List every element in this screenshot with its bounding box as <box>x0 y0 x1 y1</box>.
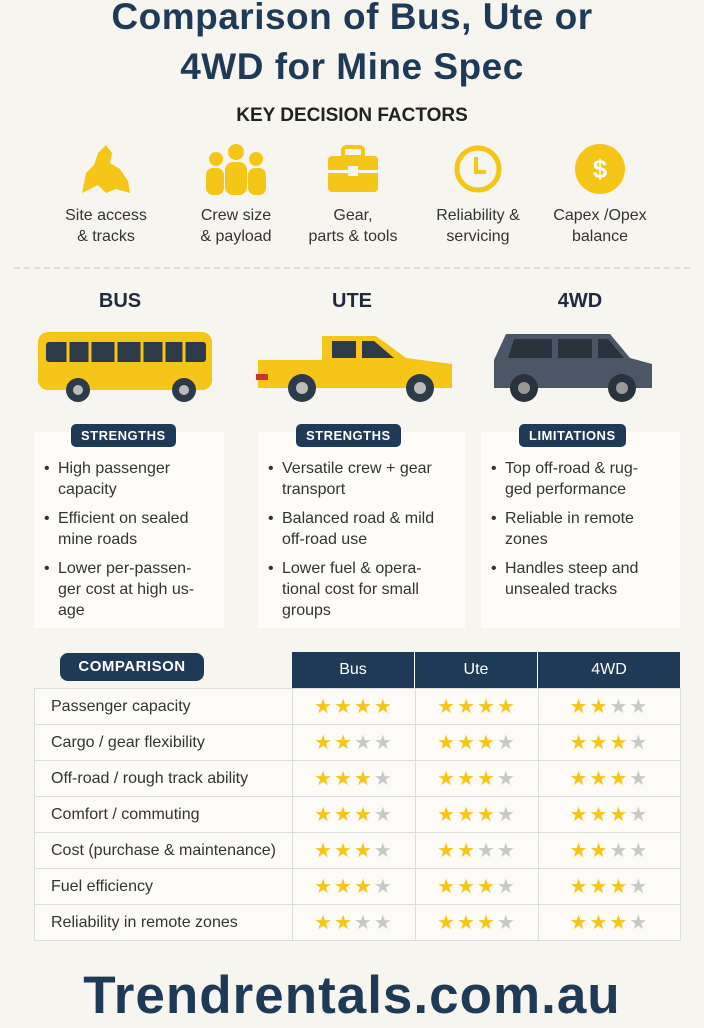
factor: capex: $ <box>593 154 608 184</box>
comparison table: ★★★★ <box>314 696 394 718</box>
badge: ute strengths <box>296 424 401 447</box>
comparison table: Cost (purchase & maintenance) <box>51 842 276 858</box>
panel: ute strengths: tional cost for small <box>282 581 419 598</box>
panel: 4wd limitations: unsealed tracks <box>505 581 617 598</box>
factor: gear <box>309 145 397 245</box>
heading: bus: BUS <box>99 290 141 312</box>
panel: bus strengths <box>34 432 224 628</box>
factor: gear: parts & tools <box>309 228 397 245</box>
factor: capex: Capex /Opex <box>553 207 647 224</box>
panel: ute strengths <box>258 432 465 628</box>
comparison table: ★★★★ <box>314 732 394 754</box>
badge: 4wd limitations: LIMITATIONS <box>529 428 616 443</box>
panel: ute strengths: groups <box>282 602 331 619</box>
comparison table: ★★★★ <box>570 768 649 790</box>
comparison table: ★★★★ <box>437 912 517 934</box>
comparison table: ★★★★ <box>437 840 517 862</box>
title: 4WD for Mine Spec <box>180 46 524 87</box>
comparison table: ★★★★ <box>314 804 394 826</box>
comparison table: Cargo / gear flexibility <box>51 734 205 750</box>
panel: 4wd limitations: ged performance <box>505 481 626 498</box>
icon: ute <box>256 336 452 402</box>
panel: bus strengths: Lower per-passen- <box>58 560 191 577</box>
comparison table: ★★★★ <box>437 696 517 718</box>
comparison table: ★★★★ <box>570 912 649 934</box>
heading: key decision factors: KEY DECISION FACTORS <box>236 105 468 126</box>
table header: 4WD <box>591 661 627 678</box>
comparison table: ★★★★ <box>314 768 394 790</box>
panel: bus strengths: Efficient on sealed <box>58 510 188 527</box>
panel: 4wd limitations: zones <box>505 531 548 548</box>
panel: bus strengths: age <box>58 602 85 619</box>
panel: bus strengths: capacity <box>58 481 117 498</box>
badge: comparison <box>60 653 204 681</box>
panel: 4wd limitations: Reliable in remote <box>505 510 634 527</box>
icon: bus <box>38 332 212 402</box>
panel: 4wd limitations: Handles steep and <box>505 560 638 577</box>
comparison table: Off-road / rough track ability <box>51 770 248 786</box>
comparison table: ★★★★ <box>437 876 517 898</box>
comparison table: ★★★★ <box>570 804 649 826</box>
icon: 4wd <box>494 334 652 402</box>
panel: bus strengths: mine roads <box>58 531 137 548</box>
factor: reliability <box>436 146 520 245</box>
title <box>111 0 593 87</box>
comparison table: Comfort / commuting <box>51 806 199 822</box>
heading: ute: UTE <box>332 290 372 312</box>
panel: bus strengths: ger cost at high us- <box>58 581 194 598</box>
panel: 4wd limitations: Top off-road & rug- <box>505 460 638 477</box>
factor: crew size <box>200 144 272 245</box>
comparison table: ★★★★ <box>437 768 517 790</box>
table header: Ute <box>464 661 488 678</box>
comparison table: ★★★★ <box>570 840 649 862</box>
badge: comparison: COMPARISON <box>78 658 186 675</box>
factor: crew size: & payload <box>200 228 272 245</box>
factor: reliability: servicing <box>446 228 510 245</box>
panel: ute strengths: Versatile crew + gear <box>282 460 432 477</box>
comparison table: ★★★★ <box>437 804 517 826</box>
factor: capex <box>553 144 647 245</box>
factor: site access: Site access <box>65 207 147 224</box>
badge: ute strengths: STRENGTHS <box>306 428 391 443</box>
comparison table: ★★★★ <box>570 732 649 754</box>
comparison table: Passenger capacity <box>51 698 191 714</box>
comparison table <box>34 688 681 941</box>
factor: crew size: Crew size <box>201 207 271 224</box>
panel: ute strengths: Lower fuel & opera- <box>282 560 422 577</box>
comparison table: ★★★★ <box>314 876 394 898</box>
heading: 4wd: 4WD <box>558 290 602 312</box>
panel: ute strengths: off-road use <box>282 531 367 548</box>
factor: site access: & tracks <box>77 228 135 245</box>
panel: ute strengths: transport <box>282 481 345 498</box>
comparison table: ★★★★ <box>570 876 649 898</box>
comparison table: ★★★★ <box>314 840 394 862</box>
footer url: Trendrentals.com.au <box>83 966 621 1025</box>
comparison table: ★★★★ <box>570 696 649 718</box>
factor: gear: Gear, <box>333 207 373 224</box>
table header <box>292 652 680 688</box>
factor: capex: balance <box>572 228 628 245</box>
panel: ute strengths: Balanced road & mild <box>282 510 434 527</box>
badge: bus strengths <box>71 424 176 447</box>
factor: site access <box>65 145 147 245</box>
panel: bus strengths: High passenger <box>58 460 170 477</box>
badge: bus strengths: STRENGTHS <box>81 428 166 443</box>
comparison table: Fuel efficiency <box>51 878 153 894</box>
comparison table: ★★★★ <box>437 732 517 754</box>
comparison table: ★★★★ <box>314 912 394 934</box>
badge: 4wd limitations <box>519 424 626 447</box>
comparison table: Reliability in remote zones <box>51 914 238 930</box>
factor: reliability: Reliability & <box>436 207 520 224</box>
panel: 4wd limitations <box>481 432 680 628</box>
table header: Bus <box>339 661 367 678</box>
